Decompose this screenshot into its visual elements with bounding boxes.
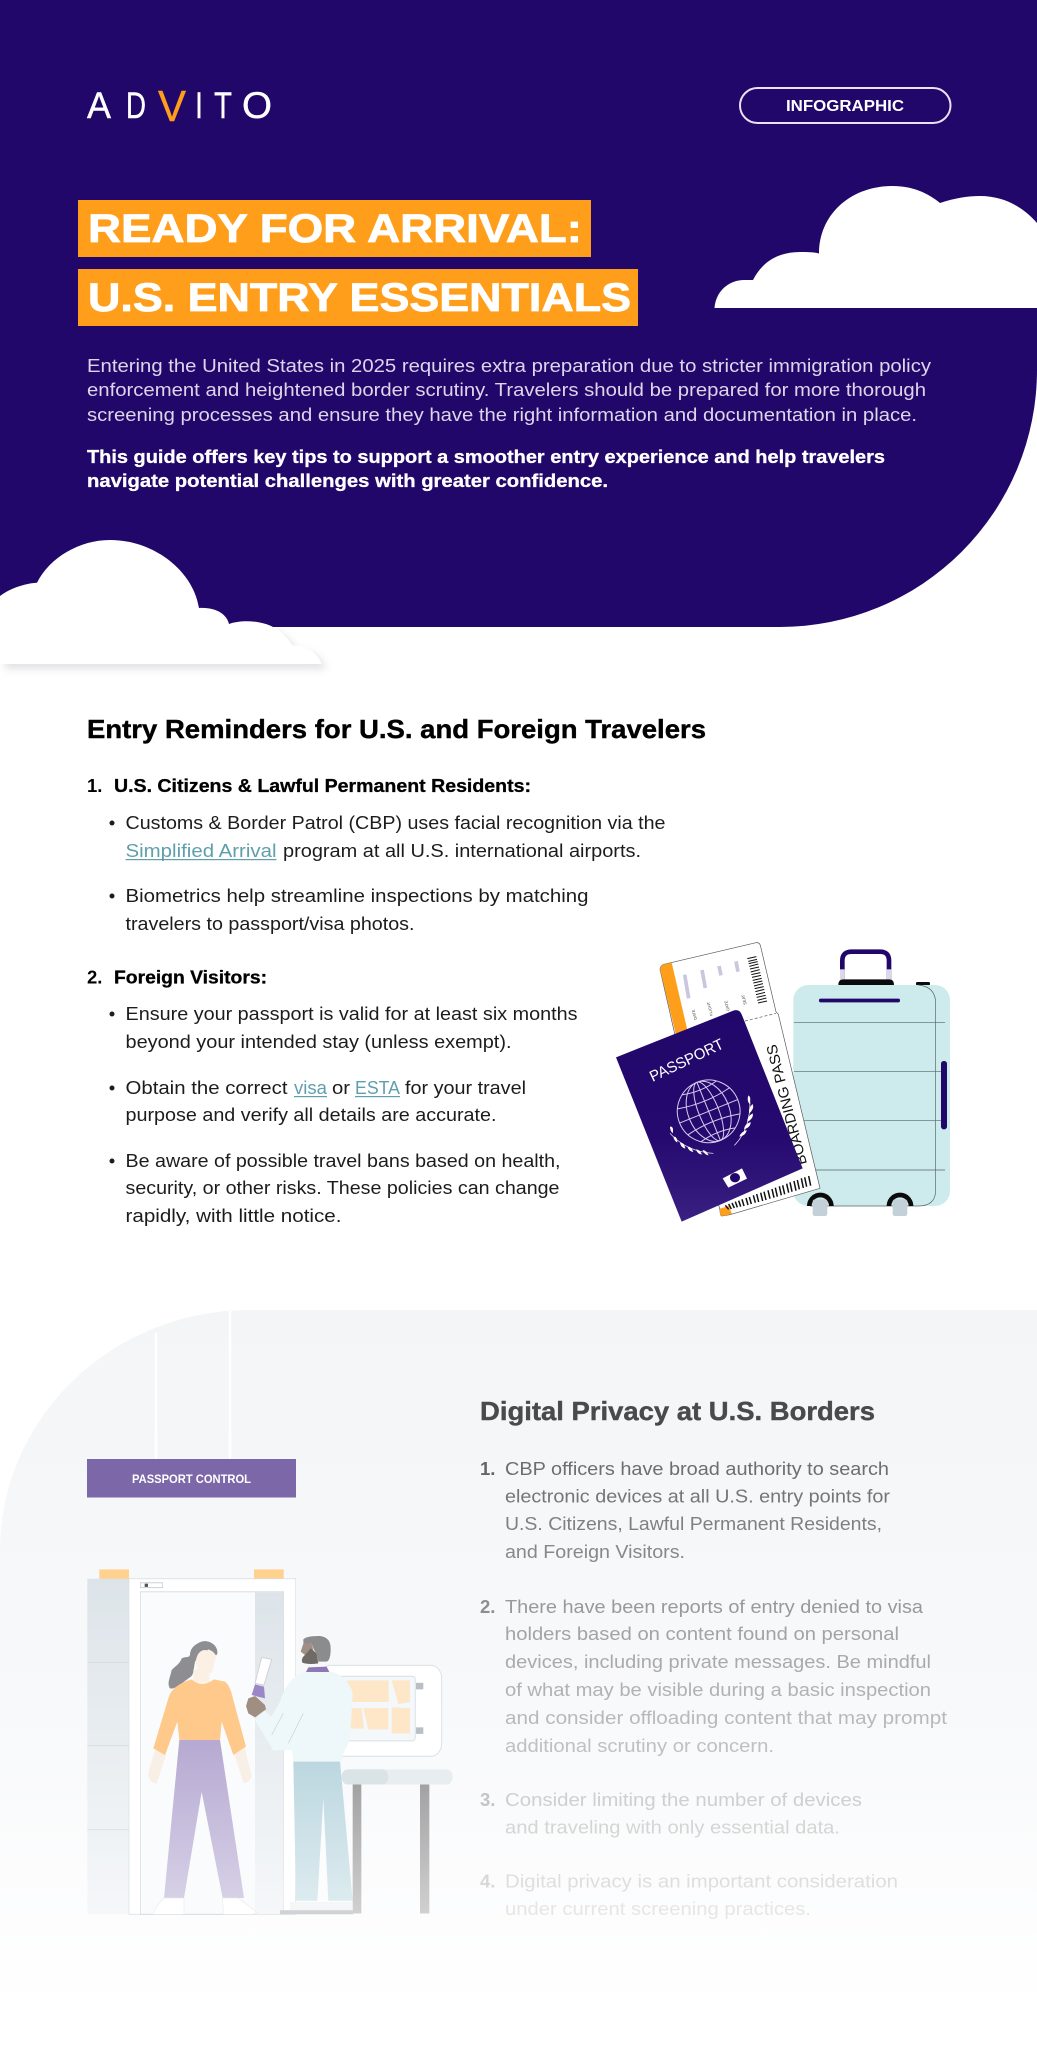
text block: foreign visitors: or xyxy=(332,1077,350,1098)
logo: ADVITO: D xyxy=(126,85,146,126)
icon: passport: PASSPORT xyxy=(647,1036,727,1086)
logo: ADVITO xyxy=(87,82,272,131)
icon: boarding pass: FLIGHT xyxy=(706,1001,714,1016)
icon: passport xyxy=(616,1010,803,1222)
text block: foreign visitors: beyond your intended stay (unless exempt). xyxy=(126,1031,512,1052)
text block: foreign visitors: purpose and verify all details are accurate. xyxy=(126,1104,496,1125)
heading: digital privacy: Digital Privacy at U.S. Borders xyxy=(480,1396,875,1426)
icon: cloud bottom left xyxy=(0,540,327,669)
text block: foreign visitors: visa xyxy=(294,1077,328,1098)
list item 4: 4. xyxy=(480,1870,495,1892)
list item 2: and consider offloading content that may prompt xyxy=(505,1707,947,1728)
logo: ADVITO: I xyxy=(195,85,203,126)
list item 2: holders based on content found on personal xyxy=(505,1623,899,1644)
list item 2: There have been reports of entry denied to visa xyxy=(505,1596,924,1617)
icon: traveler legs xyxy=(153,1740,257,1914)
intro paragraph xyxy=(87,355,932,425)
list item 1: electronic devices at all U.S. entry points for xyxy=(505,1486,890,1506)
text block: citizens and residents: Customs & Border Patrol (CBP) uses facial recognition via the xyxy=(126,812,666,833)
text block: citizens and residents: U.S. Citizens & Lawful Permanent Residents: xyxy=(114,775,531,796)
text block: foreign visitors: security, or other risks. These policies can change xyxy=(126,1177,560,1198)
icon: scanner gate xyxy=(87,1569,296,1914)
list item 1: CBP officers have broad authority to search xyxy=(505,1458,889,1479)
icon: boarding pass xyxy=(660,943,820,1216)
intro bold statement: navigate potential challenges with greater confidence. xyxy=(87,470,608,491)
icon: boarding pass: BOARDING PASS xyxy=(764,1042,811,1167)
text block: foreign visitors: Foreign Visitors: xyxy=(114,966,267,988)
intro paragraph: enforcement and heightened border scrutiny. Travelers should be prepared for more thorough xyxy=(87,379,926,400)
icon: officer upper body xyxy=(246,1636,353,1762)
intro paragraph: Entering the United States in 2025 requires extra preparation due to stricter immigration policy xyxy=(87,355,932,376)
list item 1: and Foreign Visitors. xyxy=(505,1541,685,1562)
text block: citizens and residents: Simplified Arrival xyxy=(126,840,276,861)
intro bold statement: This guide offers key tips to support a smoother entry experience and help travelers xyxy=(87,446,885,467)
list item 2: 2. xyxy=(480,1596,495,1617)
icon: boarding pass: SEAT xyxy=(740,994,748,1005)
icon: x-ray monitor and table xyxy=(320,1665,453,1913)
text block: citizens and residents: travelers to passport/visa photos. xyxy=(126,913,414,934)
text block: citizens and residents: program at all U.S. international airports. xyxy=(283,840,641,861)
list item 1: U.S. Citizens, Lawful Permanent Residents, xyxy=(505,1513,882,1534)
title: U.S. ENTRY ESSENTIALS xyxy=(88,276,631,320)
list item 3: and traveling with only essential data. xyxy=(505,1816,840,1838)
list item 3: Consider limiting the number of devices xyxy=(505,1789,862,1810)
text block: foreign visitors: Obtain the correct xyxy=(126,1077,288,1098)
logo: ADVITO: V xyxy=(158,82,187,131)
list item 4: Digital privacy is an important consideration xyxy=(505,1870,898,1892)
text block: citizens and residents: 1. xyxy=(87,775,102,796)
text block: foreign visitors: 2. xyxy=(87,966,102,988)
text block: foreign visitors: Ensure your passport is valid for at least six months xyxy=(126,1003,578,1024)
title xyxy=(78,200,638,326)
icon: suitcase xyxy=(793,952,950,1216)
list item 1 xyxy=(480,1458,890,1562)
logo: ADVITO: O xyxy=(242,85,272,126)
list item 4: under current screening practices. xyxy=(505,1898,811,1919)
badge: INFOGRAPHIC: INFOGRAPHIC xyxy=(786,98,904,115)
title: READY FOR ARRIVAL: xyxy=(88,207,582,251)
text block: citizens and residents: Biometrics help streamline inspections by matching xyxy=(126,885,588,906)
list item 3: 3. xyxy=(480,1789,495,1810)
heading: entry reminders: Entry Reminders for U.S. and Foreign Travelers xyxy=(87,714,706,744)
intro bold statement xyxy=(87,446,885,491)
list item 2 xyxy=(480,1596,947,1756)
text block: citizens and residents xyxy=(87,775,666,934)
list item 2: additional scrutiny or concern. xyxy=(505,1735,774,1756)
illustration: passport, boarding pass and suitcase xyxy=(616,943,950,1222)
icon: officer legs xyxy=(280,1761,353,1914)
text block: foreign visitors: rapidly, with little notice. xyxy=(126,1205,342,1226)
icon: boarding pass: DATE xyxy=(691,1009,698,1020)
text block: foreign visitors xyxy=(87,966,578,1226)
intro paragraph: screening processes and ensure they have the right information and documentation in place. xyxy=(87,404,917,425)
list item 2: of what may be visible during a basic inspection xyxy=(505,1679,931,1700)
logo: ADVITO: A xyxy=(87,85,111,126)
list item 3 xyxy=(480,1789,862,1838)
logo: ADVITO: T xyxy=(214,85,232,126)
icon: boarding pass: GATE xyxy=(723,1000,731,1012)
panel: digital privacy background xyxy=(0,1310,1037,2048)
illustration: security scan xyxy=(87,1569,453,1914)
sign: passport control: PASSPORT CONTROL xyxy=(132,1474,251,1486)
badge: INFOGRAPHIC xyxy=(740,88,950,123)
icon: cloud top right xyxy=(714,186,1037,308)
panel: header background xyxy=(0,0,1037,627)
list item 2: devices, including private messages. Be mindful xyxy=(505,1651,931,1672)
text block: foreign visitors: ESTA xyxy=(355,1077,401,1098)
list item 1: 1. xyxy=(480,1458,495,1479)
text block: foreign visitors: Be aware of possible travel bans based on health, xyxy=(126,1150,560,1171)
text block: foreign visitors: for your travel xyxy=(405,1077,526,1098)
icon: traveler upper body xyxy=(148,1641,252,1783)
sign: passport control xyxy=(87,1459,296,1498)
list item 4 xyxy=(480,1870,898,1919)
